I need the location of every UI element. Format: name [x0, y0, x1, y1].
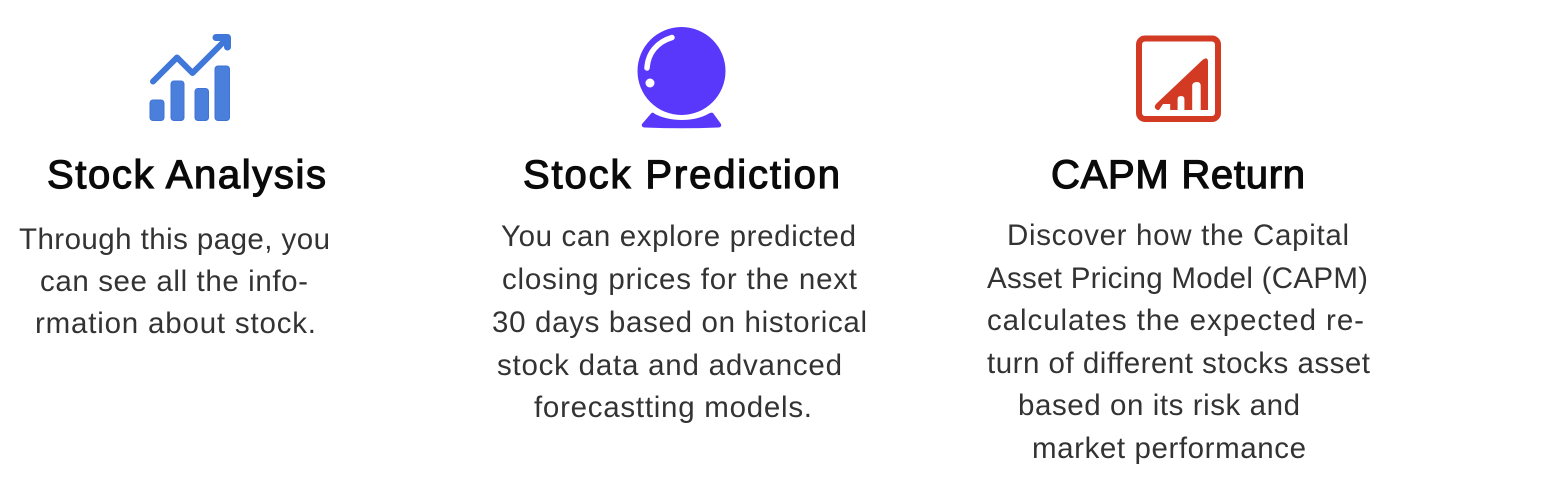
- panel: stock prediction: [492, 27, 867, 424]
- heading: Stock Prediction: Stock Prediction: [523, 153, 840, 197]
- text: stock prediction description: [492, 220, 867, 424]
- text: stock prediction description: closing prices for the next: [502, 263, 857, 296]
- text: CAPM return description: calculates the expected re-: [987, 304, 1364, 337]
- icon: crystal ball: [638, 27, 726, 128]
- heading: Stock Analysis: Stock Analysis: [47, 153, 326, 197]
- text: stock prediction description: You can explore predicted: [501, 220, 856, 253]
- panel: stock analysis: [19, 38, 330, 340]
- text: stock prediction description: stock data and advanced: [497, 349, 842, 382]
- text: CAPM return description: market performance: [1032, 432, 1306, 465]
- text: CAPM return description: Asset Pricing Model (CAPM): [987, 262, 1368, 295]
- text: stock analysis description: rmation about stock.: [35, 307, 316, 340]
- heading: CAPM Return: CAPM Return: [1051, 153, 1305, 197]
- text: stock analysis description: can see all the info-: [40, 265, 308, 298]
- icon: framed chart: [1139, 38, 1218, 119]
- text: CAPM return description: turn of different stocks asset: [987, 347, 1370, 380]
- text: stock prediction description: 30 days based on historical: [492, 306, 867, 339]
- text: CAPM return description: Discover how the Capital: [1007, 219, 1349, 252]
- text: stock prediction description: forecastting models.: [534, 391, 812, 424]
- icon: rising bar chart: [150, 38, 230, 120]
- text: stock analysis description: [19, 223, 330, 340]
- text: CAPM return description: based on its risk and: [1018, 389, 1300, 422]
- panel: CAPM return: [987, 38, 1370, 465]
- text: CAPM return description: [987, 219, 1370, 465]
- text: stock analysis description: Through this page, you: [19, 223, 330, 256]
